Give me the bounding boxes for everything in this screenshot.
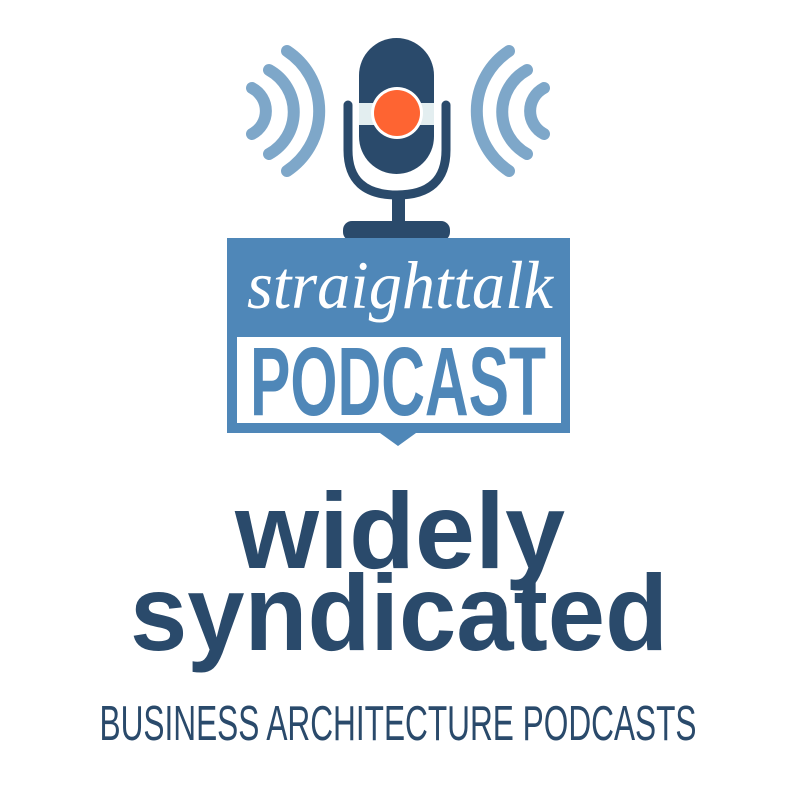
banner: straighttalk podcast <box>227 238 570 446</box>
white box with PODCAST <box>237 327 561 436</box>
white box with PODCAST: PODCAST <box>250 327 546 436</box>
heading: syndicated: syndicated <box>130 552 668 673</box>
icon: sound waves left <box>252 51 319 171</box>
heading: widely: widely <box>234 470 565 591</box>
script title: straighttalk: straighttalk <box>247 247 555 323</box>
icon: sound waves right <box>477 51 544 171</box>
icon: microphone <box>343 38 450 241</box>
